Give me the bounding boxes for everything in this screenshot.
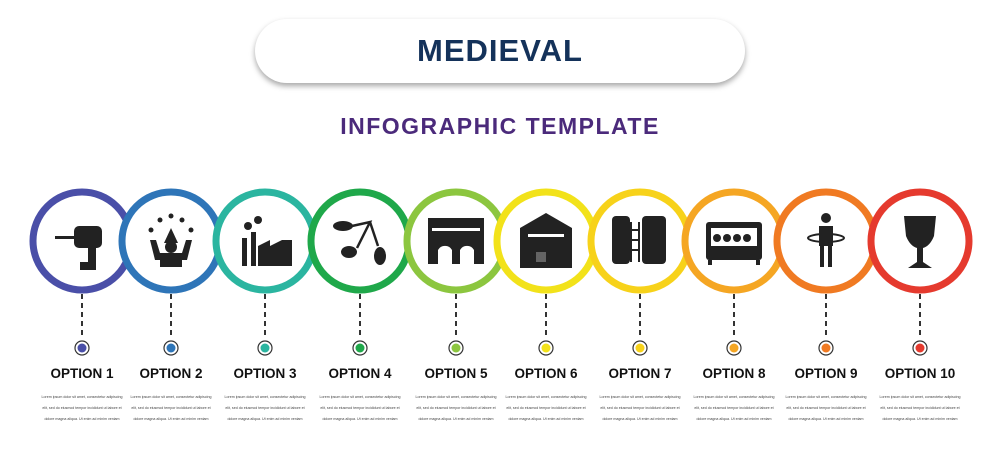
text: OPTION 9 bbox=[794, 366, 858, 381]
text: OPTION 8 bbox=[702, 366, 766, 381]
text: OPTION 3 bbox=[233, 366, 296, 381]
text: OPTION 1 bbox=[50, 366, 114, 381]
text: OPTION 7 bbox=[608, 366, 672, 381]
option 10 circle bbox=[871, 192, 969, 355]
option 7 circle bbox=[591, 192, 689, 355]
text: Lorem ipsum dolor sit amet, consectetur adipiscing elit, sed do eiusmod tempor incididunt ut labore et dolore magna aliqua. Ut enim ad minim veniam bbox=[225, 395, 305, 421]
text: Lorem ipsum dolor sit amet, consectetur adipiscing elit, sed do eiusmod tempor incididunt ut labore et dolore magna aliqua. Ut enim ad minim veniam bbox=[506, 395, 586, 421]
option 3 circle bbox=[216, 192, 314, 355]
text: Lorem ipsum dolor sit amet, consectetur adipiscing elit, sed do eiusmod tempor incididunt ut labore et dolore magna aliqua. Ut enim ad minim veniam bbox=[600, 395, 680, 421]
option 6 circle bbox=[497, 192, 595, 355]
option 4 circle bbox=[311, 192, 409, 355]
description texts bbox=[42, 395, 960, 421]
option 9 circle bbox=[777, 192, 875, 355]
text: Lorem ipsum dolor sit amet, consectetur adipiscing elit, sed do eiusmod tempor incididunt ut labore et dolore magna aliqua. Ut enim ad minim veniam bbox=[786, 395, 866, 421]
text: Lorem ipsum dolor sit amet, consectetur adipiscing elit, sed do eiusmod tempor incididunt ut labore et dolore magna aliqua. Ut enim ad minim veniam bbox=[880, 395, 960, 421]
text: OPTION 5 bbox=[424, 366, 488, 381]
text: Lorem ipsum dolor sit amet, consectetur adipiscing elit, sed do eiusmod tempor incididunt ut labore et dolore magna aliqua. Ut enim ad minim veniam bbox=[416, 395, 496, 421]
option 5 circle bbox=[407, 192, 505, 355]
option 8 circle bbox=[685, 192, 783, 355]
text: OPTION 10 bbox=[885, 366, 955, 381]
text: OPTION 6 bbox=[514, 366, 578, 381]
text: OPTION 2 bbox=[139, 366, 202, 381]
text: OPTION 4 bbox=[328, 366, 392, 381]
text: Lorem ipsum dolor sit amet, consectetur adipiscing elit, sed do eiusmod tempor incididunt ut labore et dolore magna aliqua. Ut enim ad minim veniam bbox=[694, 395, 774, 421]
subtitle: INFOGRAPHIC TEMPLATE bbox=[340, 113, 660, 139]
option 1 circle bbox=[33, 192, 131, 355]
option labels bbox=[50, 366, 955, 381]
text: Lorem ipsum dolor sit amet, consectetur adipiscing elit, sed do eiusmod tempor incididunt ut labore et dolore magna aliqua. Ut enim ad minim veniam bbox=[131, 395, 211, 421]
title: MEDIEVAL bbox=[417, 33, 583, 68]
text: Lorem ipsum dolor sit amet, consectetur adipiscing elit, sed do eiusmod tempor incididunt ut labore et dolore magna aliqua. Ut enim ad minim veniam bbox=[42, 395, 122, 421]
option 2 circle bbox=[122, 192, 220, 355]
text: Lorem ipsum dolor sit amet, consectetur adipiscing elit, sed do eiusmod tempor incididunt ut labore et dolore magna aliqua. Ut enim ad minim veniam bbox=[320, 395, 400, 421]
title pill bbox=[255, 19, 745, 83]
